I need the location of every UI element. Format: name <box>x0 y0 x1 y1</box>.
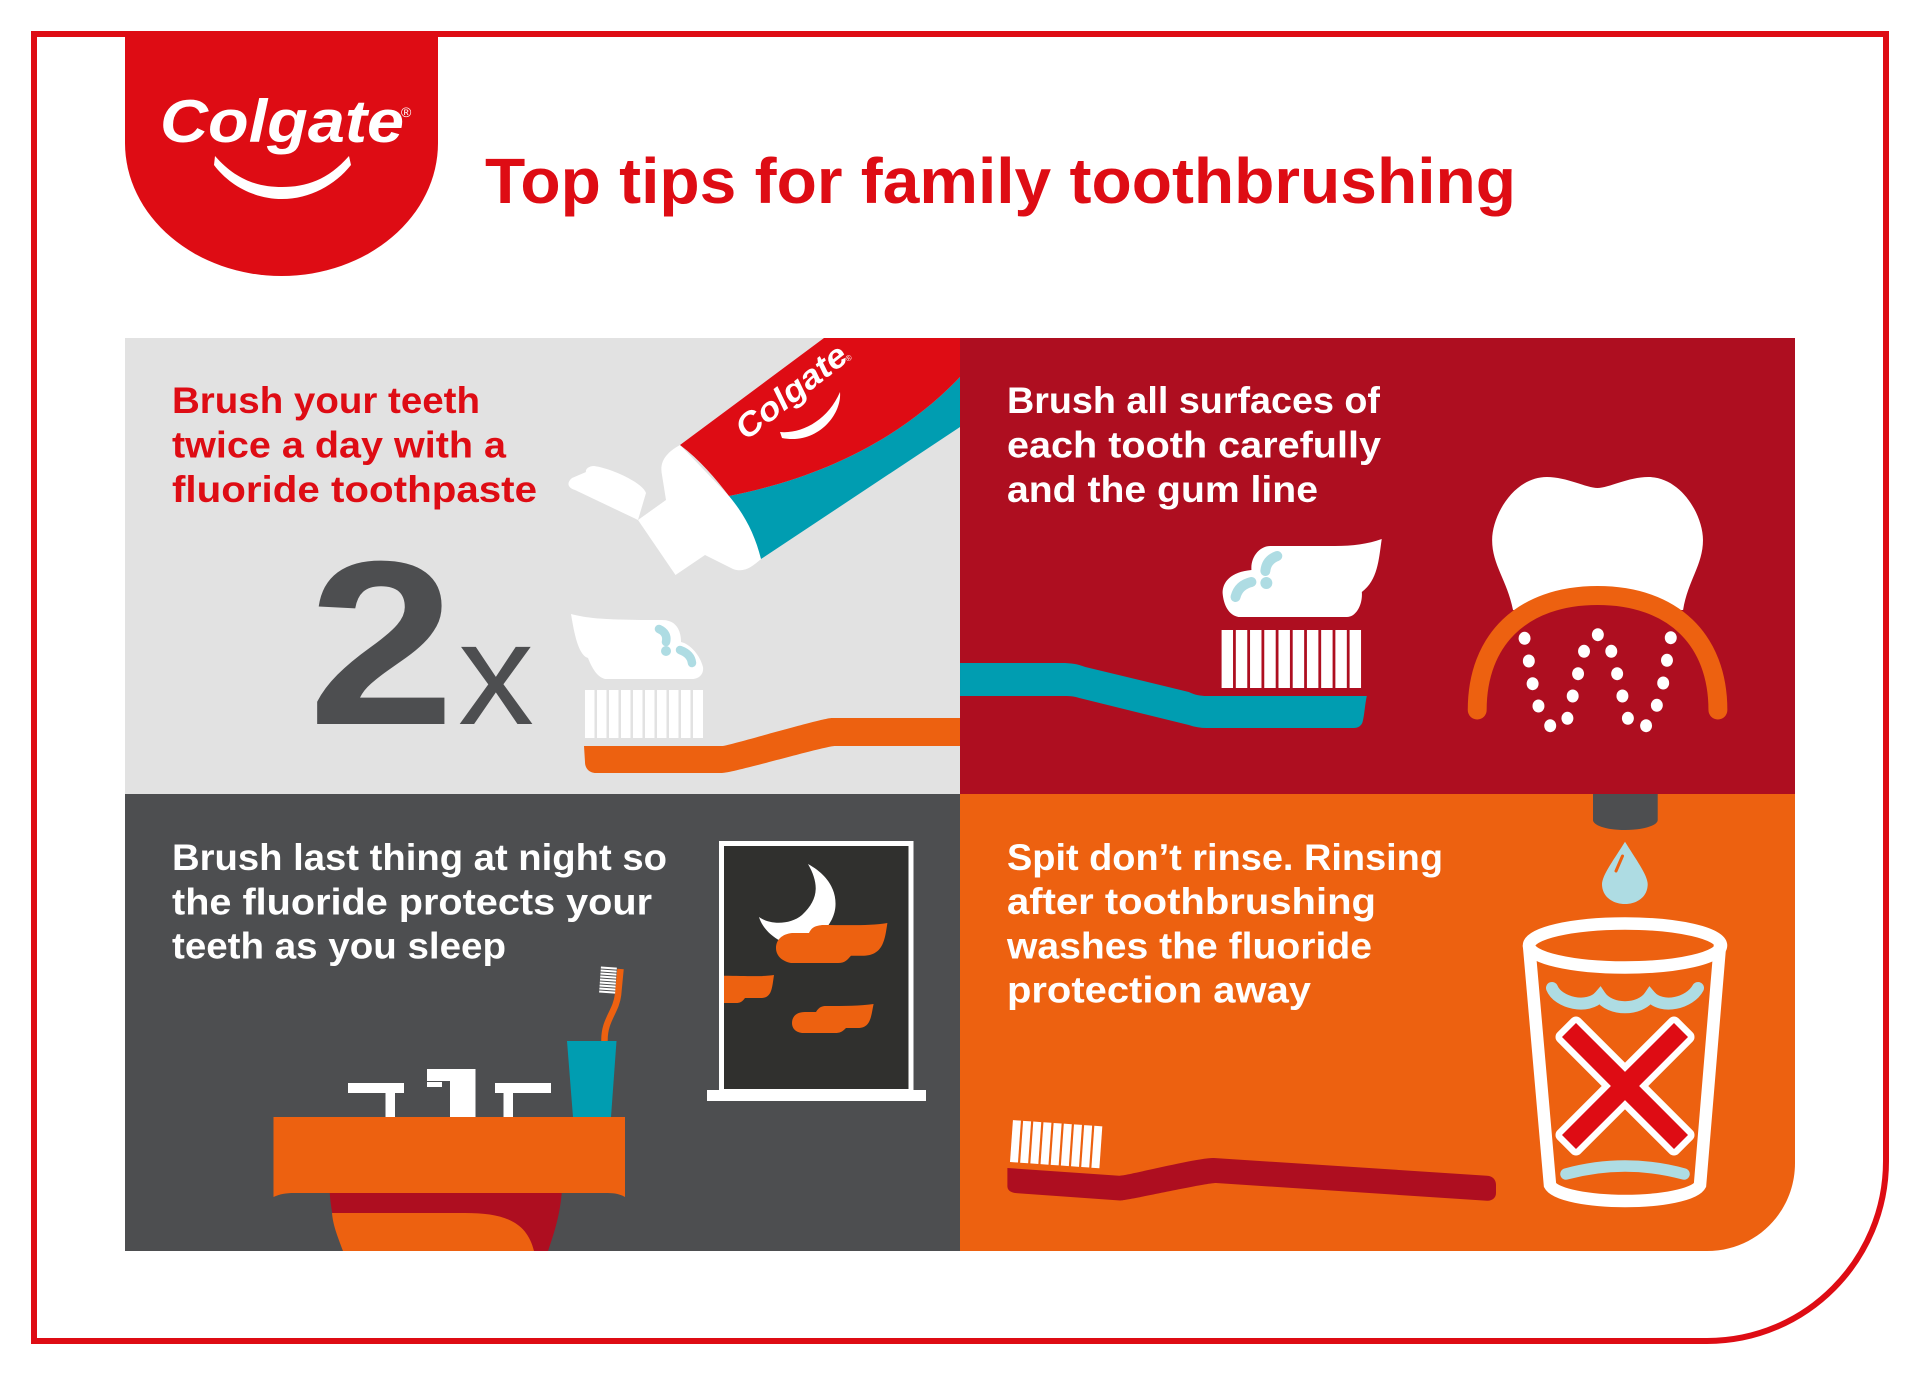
tip text: spit: protection away <box>1007 970 1311 1010</box>
gum arch <box>1477 596 1718 710</box>
tip text: twice a day <box>172 380 537 510</box>
logo registered mark: ® <box>401 104 412 120</box>
2x numeral: x <box>458 592 534 755</box>
tip text: all surfaces: and the gum line <box>1007 469 1318 510</box>
tip text: spit: Spit don’t rinse. Rinsing <box>1007 837 1443 878</box>
sink <box>274 1117 625 1251</box>
panel: brush twice a day <box>125 336 960 794</box>
moon <box>759 864 836 945</box>
cup with toothbrush <box>567 967 620 1117</box>
clouds <box>776 923 887 963</box>
tip text: spit: after toothbrushing <box>1007 881 1376 922</box>
tip text: at night: the fluoride protects your <box>172 882 652 922</box>
2x numeral <box>308 512 534 774</box>
toothpaste tube <box>568 336 960 575</box>
tooth <box>1492 477 1703 610</box>
tube logo: Colgate <box>728 336 854 447</box>
tip text: at night <box>172 837 667 966</box>
panel: spit don't rinse <box>960 794 1795 1251</box>
glass <box>1529 924 1721 1201</box>
toothbrush: orange <box>571 614 960 773</box>
red cross <box>1562 1023 1688 1149</box>
tip text: twice a day: fluoride toothpaste <box>172 469 537 510</box>
tube logo registered mark: ® <box>844 353 854 364</box>
tip text: all surfaces: Brush all surfaces of <box>1007 380 1381 421</box>
taps <box>348 1069 551 1117</box>
water lines <box>1552 988 1698 1174</box>
tip text: all surfaces <box>1007 380 1381 510</box>
tip text: twice a day: Brush your teeth <box>172 380 480 421</box>
logo shield <box>125 34 438 276</box>
tip text: spit: washes the fluoride <box>1006 926 1372 966</box>
tip text: at night: teeth as you sleep <box>172 926 506 966</box>
tip text: at night: Brush last thing at night so <box>172 837 667 878</box>
window <box>707 844 926 1101</box>
panel: last thing at night <box>125 794 960 1251</box>
toothbrush: teal <box>960 539 1382 728</box>
toothbrush: dark red <box>1007 1120 1496 1201</box>
water drop <box>1602 842 1648 904</box>
tip text: spit <box>1006 837 1443 1010</box>
logo smile <box>214 156 351 199</box>
tap spout <box>1593 794 1658 830</box>
2x numeral: 2 <box>308 512 455 774</box>
tip text: all surfaces: each tooth carefully <box>1007 424 1381 466</box>
panel: brush all surfaces <box>960 338 1795 794</box>
tip text: twice a day: twice a day with a <box>172 424 506 466</box>
teeth dots <box>1519 628 1677 732</box>
tube logo smile <box>780 392 840 439</box>
title: Top tips for family toothbrushing <box>485 145 1516 217</box>
logo wordmark: Colgate <box>160 88 404 155</box>
